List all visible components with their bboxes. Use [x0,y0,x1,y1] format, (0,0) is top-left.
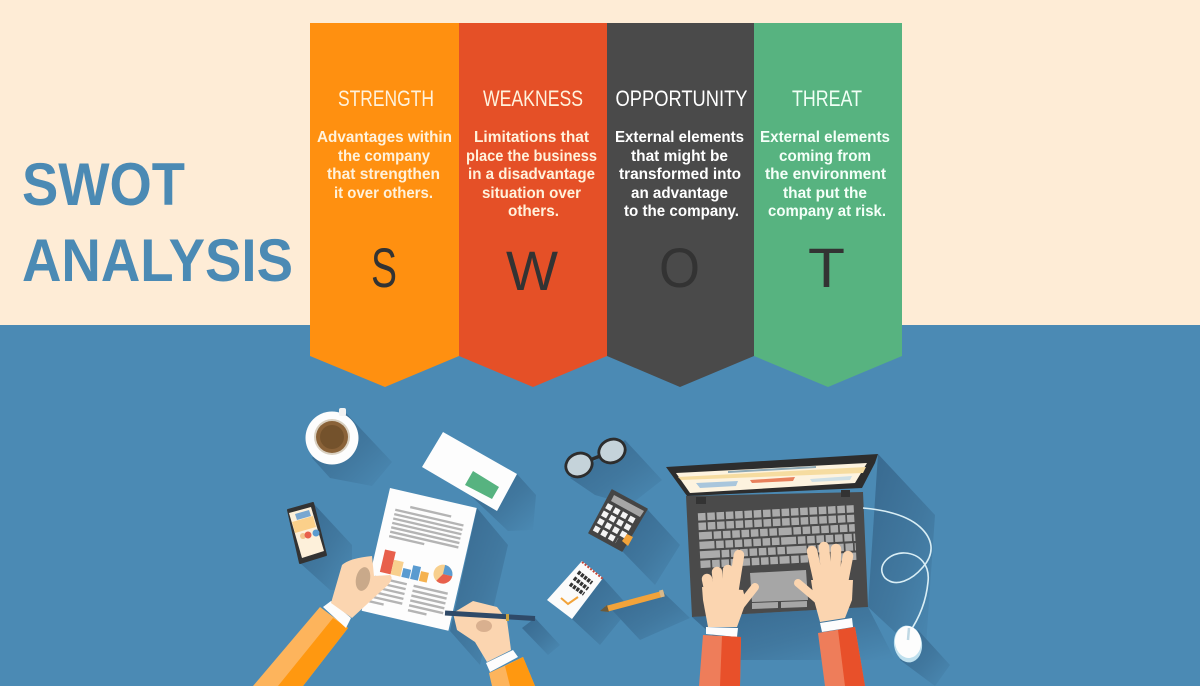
panel: threat [754,23,902,387]
title [22,151,293,294]
hinges [696,490,850,504]
panel: strength: Advantages within [317,129,452,146]
panel: opportunity: to the company. [624,203,739,220]
icon: envelope [422,432,536,531]
document text lines [369,503,465,618]
panel: threat: External elements [760,129,890,146]
panel: weakness: Limitations that [474,129,589,146]
laptop screen [666,454,878,496]
icon: calculator [589,490,680,585]
panel: weakness: W [506,239,558,302]
icon: pencil [600,590,690,640]
panel: strength: STRENGTH [338,86,434,111]
panel: opportunity [607,23,754,387]
panel: opportunity: an advantage [631,185,728,202]
mouse and cable [863,508,950,686]
panel: threat: that put the [783,185,867,202]
panel: weakness [459,23,607,387]
panel: opportunity: OPPORTUNITY [616,86,748,111]
keyboard [698,509,856,564]
background: blue desk [0,325,1200,686]
panel: weakness: others. [508,203,559,220]
panel: weakness: WEAKNESS [483,86,583,111]
panel: opportunity: that might be [631,148,728,165]
background: cream top band [0,0,1200,325]
panel: threat: the environment [765,166,886,183]
left typing hand and sleeve [699,555,755,686]
title: ANALYSIS [22,227,293,294]
panel: threat: company at risk. [768,203,886,220]
icon: coffee cup [306,408,392,486]
panel: weakness: situation over [482,185,581,202]
panel: threat: THREAT [792,86,862,111]
panel: strength: the company [338,148,430,165]
panel: opportunity: transformed into [619,166,741,183]
panel: strength: it over others. [334,185,433,202]
panel: strength: S [371,236,397,299]
panel: weakness: place the business [466,148,597,165]
icon: notepad [547,561,630,645]
left arm holding document [253,556,392,686]
icon: smartphone [288,503,352,590]
panel: strength: that strengthen [327,166,440,183]
icon: laptop [666,454,935,660]
title: SWOT [22,151,185,218]
panel: weakness: in a disadvantage [468,166,595,183]
panel: opportunity: External elements [615,129,744,146]
pie chart [432,563,454,586]
bar chart [380,549,432,583]
panel: threat: coming from [779,148,871,165]
icon: glasses [562,435,662,505]
right hand with pen [445,601,560,686]
panel: strength [310,23,459,387]
panel: opportunity: O [659,236,700,299]
right typing hand and sleeve [798,547,865,686]
panel: threat: T [808,236,845,299]
icon: document with chart [362,488,508,665]
touchpad [750,570,808,609]
